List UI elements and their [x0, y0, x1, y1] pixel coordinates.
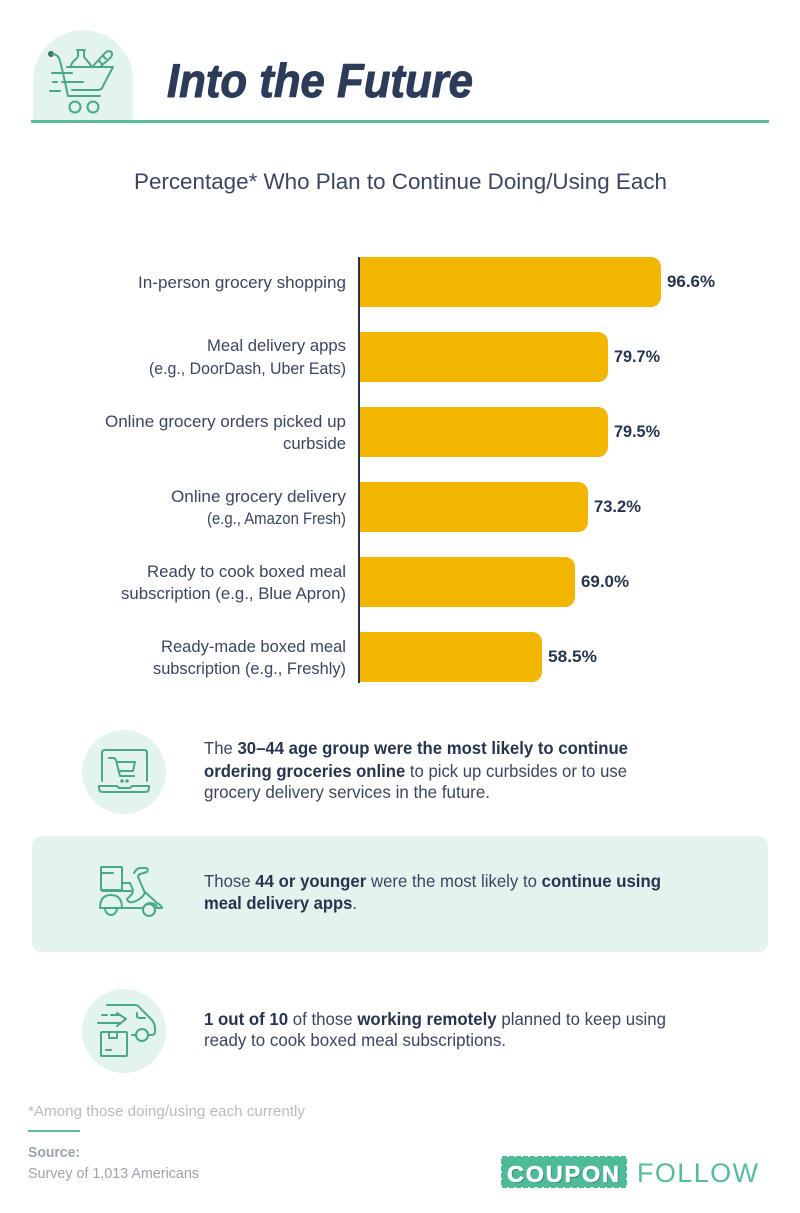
header rule [31, 120, 769, 123]
bar chart [105, 257, 715, 683]
title: Into the Future [167, 54, 473, 107]
subtitle: Percentage* Who Plan to Continue Doing/Using Each [134, 169, 667, 194]
bar values: 79.7% [614, 348, 660, 366]
source: Source: [28, 1144, 80, 1161]
logo: CouponFollow: FOLLOW [637, 1158, 759, 1188]
bar labels: (e.g., Amazon Fresh) [207, 509, 346, 528]
bar values: 58.5% [548, 648, 597, 666]
logo: CouponFollow [502, 1157, 759, 1188]
bar values: 73.2% [594, 498, 641, 516]
bar values [548, 273, 715, 666]
icon: shopping cart in arch [33, 30, 133, 121]
divider [28, 1130, 80, 1132]
bar labels: subscription (e.g., Freshly) [153, 659, 346, 678]
axis [358, 257, 360, 683]
callout text: 1 out of 10 of those working remotely planned to keep using [204, 1009, 666, 1029]
callout: 30-44 age group: ordering groceries online to pick up curbsides or to use [204, 761, 627, 781]
bar labels: subscription (e.g., Blue Apron) [121, 584, 346, 603]
callout: 30-44 age group: grocery delivery services in the future. [204, 782, 490, 802]
bars [360, 257, 661, 682]
icon: van with package [82, 989, 166, 1073]
callout text: Those 44 or younger were the most likely to continue using [204, 871, 661, 891]
callout: 30-44 age group [82, 730, 628, 814]
bar labels: In-person grocery shopping [138, 273, 346, 292]
bar labels: Online grocery delivery [171, 487, 346, 506]
icon: laptop with cart [82, 730, 166, 814]
bar values: 69.0% [581, 573, 629, 591]
bar labels: (e.g., DoorDash, Uber Eats) [149, 359, 346, 378]
bar labels: Online grocery orders picked up [105, 412, 346, 431]
callout: working remotely [82, 989, 666, 1073]
icon: delivery scooter [100, 867, 162, 916]
callout panel: 44 or younger: meal delivery apps. [204, 893, 357, 913]
bar labels [105, 273, 346, 678]
source: Survey of 1,013 Americans [28, 1165, 199, 1182]
bar values: 96.6% [667, 273, 715, 291]
logo: CouponFollow: COUPON [508, 1162, 620, 1188]
callout: working remotely: ready to cook boxed meal subscriptions. [204, 1030, 506, 1050]
bar labels: Meal delivery apps [207, 336, 346, 355]
callout text: The 30–44 age group were the most likely to continue [204, 738, 628, 758]
callout panel: 44 or younger [32, 836, 768, 952]
footnote: *Among those doing/using each currently [28, 1103, 305, 1120]
bar values: 79.5% [614, 423, 660, 441]
source [28, 1144, 199, 1182]
bar labels: Ready to cook boxed meal [147, 562, 346, 581]
logo: CouponFollow: COUPON [507, 1161, 619, 1187]
bar labels: curbside [283, 434, 346, 453]
bar labels: Ready-made boxed meal [161, 637, 346, 656]
